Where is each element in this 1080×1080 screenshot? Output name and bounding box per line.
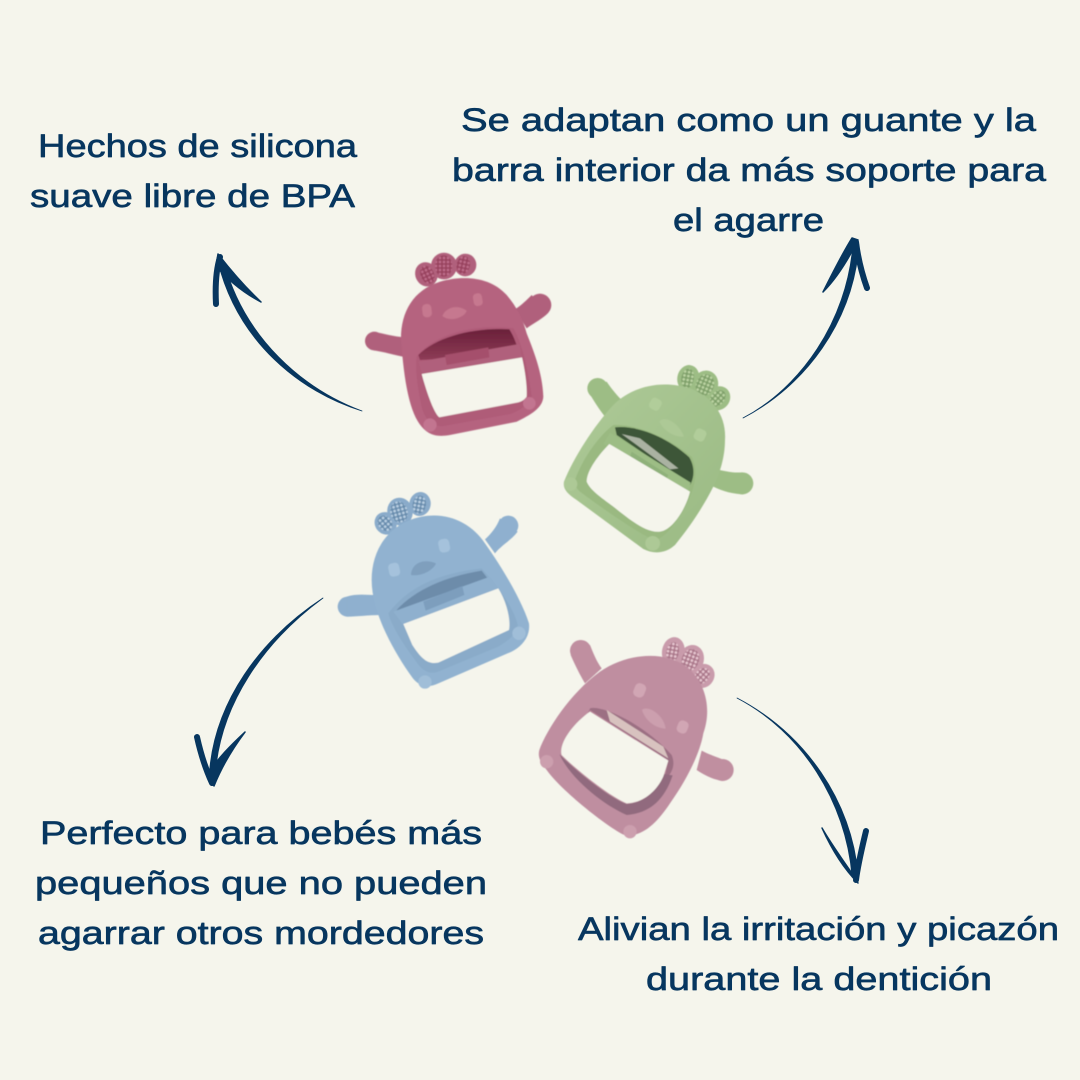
text: Perfecto para bebés: agarrar otros mordedores [38,915,484,951]
text: Hechos de silicona: suave libre de BPA [30,178,356,214]
body [539,656,707,836]
comb [660,635,720,693]
arrow: blue teether to babies text [197,598,323,786]
teether: mauve [539,635,734,838]
text: Alivian la irritación: durante la dentición [646,961,992,997]
comb [411,252,478,290]
teether: pink [365,252,551,436]
body [564,384,725,552]
arms [365,294,551,357]
text: Perfecto para bebés [35,815,487,951]
comb [675,363,735,415]
teether: blue [338,490,529,689]
arrow: pink teether to silicone text [216,254,362,411]
comb [370,490,433,539]
text: Se adaptan como un guante: barra interior da más soporte para [452,152,1046,188]
text: Hechos de silicona: Hechos de silicona [38,128,357,164]
text: Perfecto para bebés: Perfecto para bebés más [40,815,482,851]
teether: green [564,363,753,552]
text: Se adaptan como un guante: Se adaptan como un guante y la [461,102,1036,138]
body [401,278,543,436]
text: Perfecto para bebés: pequeños que no pueden [35,865,487,901]
arms [587,378,753,494]
arrow: green teether to glove text [743,238,867,418]
arrow: mauve teether to relief text [737,698,866,883]
text: Se adaptan como un guante: el agarre [673,202,824,238]
arms [570,640,734,781]
text: Hechos de silicona [30,128,357,214]
body [372,516,529,686]
arms [338,516,518,617]
text: Alivian la irritación: Alivian la irritación y picazón [578,911,1059,947]
text: Se adaptan como un guante [452,102,1046,238]
text: Alivian la irritación [578,911,1059,997]
